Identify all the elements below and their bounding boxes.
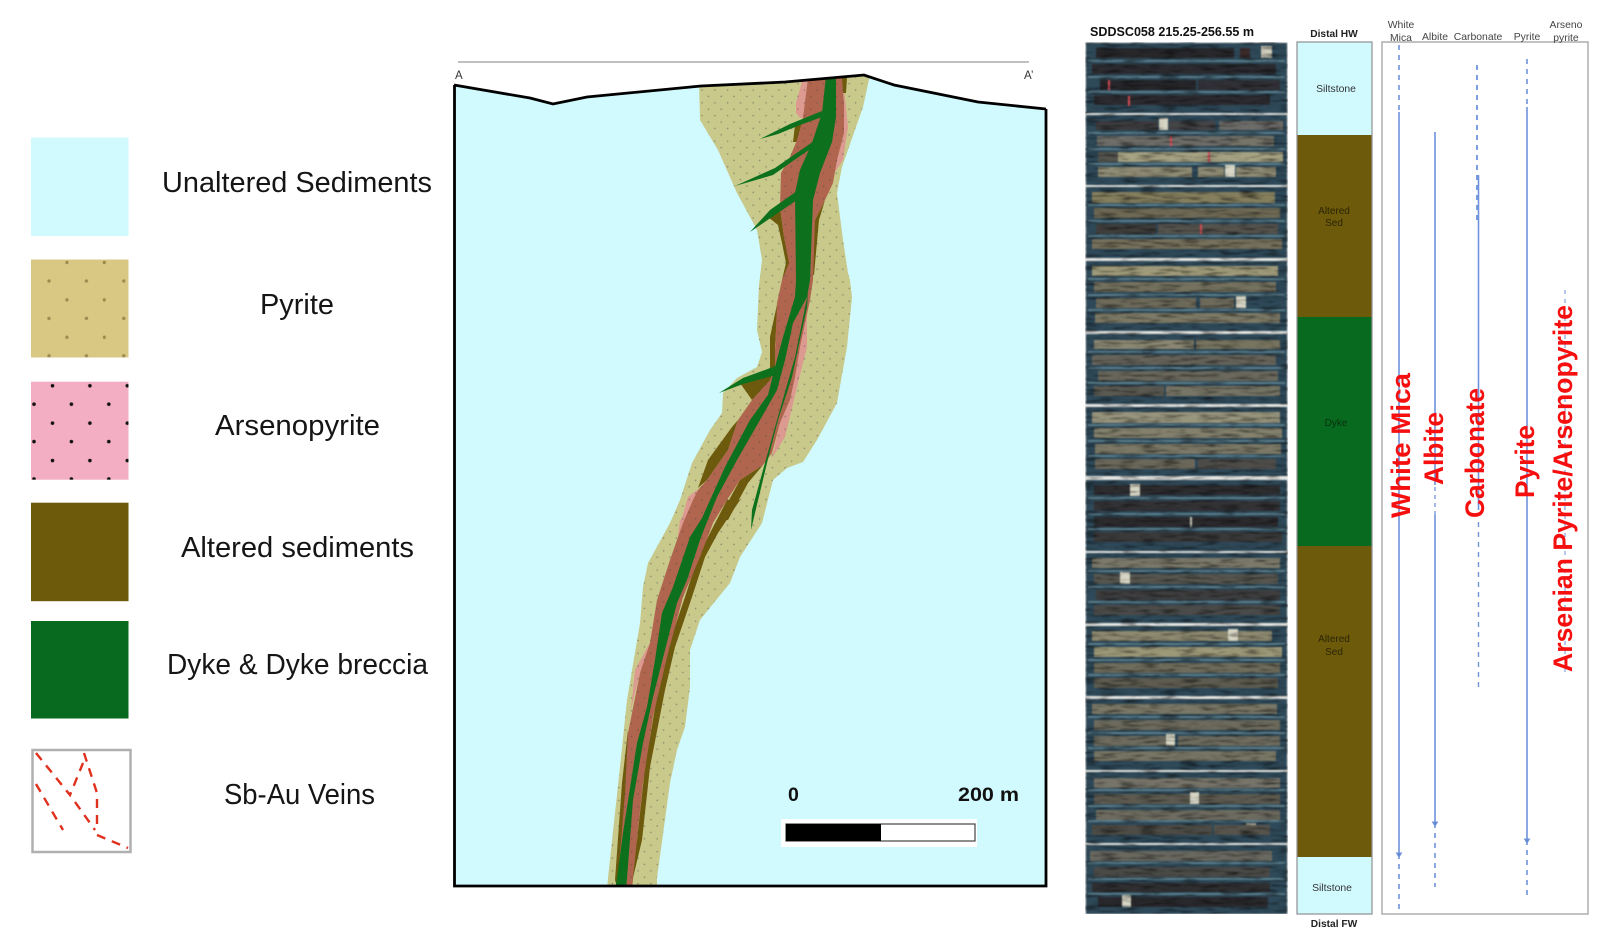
unit: siltstone bottom: Siltstone	[1312, 883, 1352, 894]
label A': A’	[1024, 70, 1033, 82]
column headers: Arseno	[1550, 20, 1583, 31]
tray 1	[1086, 43, 1287, 113]
altered sediment patches	[615, 78, 847, 890]
tray 2	[1086, 115, 1287, 185]
core tray photo column	[1085, 42, 1288, 914]
arsenian pyrite range	[1564, 290, 1566, 672]
heading: Distal FW: Distal FW	[1311, 919, 1358, 930]
white mica range	[1396, 45, 1402, 914]
unit: siltstone bottom	[1297, 857, 1372, 914]
legend	[31, 138, 432, 852]
legend item: unaltered sediments: Unaltered Sediments	[162, 167, 432, 199]
legend item: dyke and dyke breccia	[31, 621, 429, 718]
rotated label: Pyrite: Pyrite	[1510, 425, 1540, 498]
alteration and dyke bodies	[607, 75, 870, 890]
section frame	[454, 85, 1046, 886]
rotated label: White Mica: White Mica	[1386, 372, 1416, 518]
label A: A	[455, 70, 463, 82]
column frame	[1297, 42, 1372, 914]
pyrite range	[1524, 59, 1530, 895]
tray 6	[1086, 407, 1287, 476]
column headers: Pyrite	[1514, 32, 1540, 43]
dyke branches	[760, 111, 822, 139]
legend item: Sb-Au veins: Sb-Au Veins	[224, 779, 375, 811]
tray 3	[1086, 187, 1287, 258]
unit: altered sediment lower: Altered	[1318, 634, 1350, 645]
unit: altered sediment upper	[1297, 135, 1372, 317]
legend item: Sb-Au veins	[32, 750, 375, 852]
unit: altered sediment lower: Sed	[1325, 647, 1343, 658]
pyrite envelope	[607, 75, 870, 890]
tray 11	[1086, 772, 1287, 843]
dot overlay	[607, 75, 870, 890]
scale bar	[781, 784, 1019, 847]
lithology column	[1297, 29, 1372, 930]
arsenopyrite patches	[630, 78, 848, 713]
rotated label: Arsenian Pyrite/Arsenopyrite: Arsenian Pyrite/Arsenopyrite	[1548, 305, 1578, 672]
unit: altered sediment lower	[1297, 546, 1372, 857]
dyke	[615, 76, 836, 890]
legend item: dyke and dyke breccia: Dyke & Dyke breccia	[167, 649, 429, 681]
legend item: altered sediments	[31, 503, 414, 601]
column headers: Albite	[1422, 32, 1448, 43]
tray 10	[1086, 699, 1287, 770]
column headers	[1388, 20, 1583, 44]
legend item: unaltered sediments	[31, 138, 432, 236]
legend item: arsenopyrite: Arsenopyrite	[215, 410, 380, 442]
heading: Distal HW: Distal HW	[1310, 29, 1358, 40]
column headers: White	[1388, 20, 1414, 31]
core tray title: SDDSC058 215.25-256.55 m	[1090, 25, 1254, 39]
unit: altered sediment upper: Sed	[1325, 218, 1343, 229]
mineral distribution panel	[1382, 20, 1588, 914]
unaltered sediment background	[454, 75, 1046, 886]
rotated label: Albite: Albite	[1419, 412, 1449, 485]
section reference line	[458, 61, 1029, 63]
column headers: Mica	[1390, 33, 1412, 44]
tray 5	[1086, 334, 1287, 404]
column headers: Carbonate	[1454, 32, 1502, 43]
column headers: pyrite	[1553, 33, 1579, 44]
tray 7	[1086, 480, 1287, 551]
legend item: pyrite: Pyrite	[260, 289, 334, 321]
unit: altered sediment upper: Altered	[1318, 206, 1350, 217]
unit: siltstone top	[1297, 42, 1372, 135]
unit: dyke: Dyke	[1325, 418, 1348, 429]
scale bar: 0	[788, 784, 799, 806]
albite range	[1432, 132, 1438, 887]
ground surface line	[454, 75, 1046, 109]
legend item: arsenopyrite	[31, 382, 380, 480]
tray 4	[1086, 261, 1287, 331]
tray 8	[1086, 553, 1287, 623]
tray 12	[1086, 845, 1287, 914]
legend item: altered sediments: Altered sediments	[181, 532, 414, 564]
unit: siltstone top: Siltstone	[1316, 84, 1356, 95]
scale bar: 200 m	[958, 784, 1019, 806]
legend item: pyrite	[31, 260, 334, 358]
pyrite-arsenopyrite zone	[617, 78, 844, 890]
rotated label: Carbonate: Carbonate	[1460, 388, 1490, 518]
unit: dyke	[1297, 317, 1372, 546]
cross-section A-A'	[454, 62, 1046, 890]
panel frame	[1382, 42, 1588, 914]
tray 9	[1086, 626, 1287, 696]
carbonate range	[1477, 65, 1478, 688]
